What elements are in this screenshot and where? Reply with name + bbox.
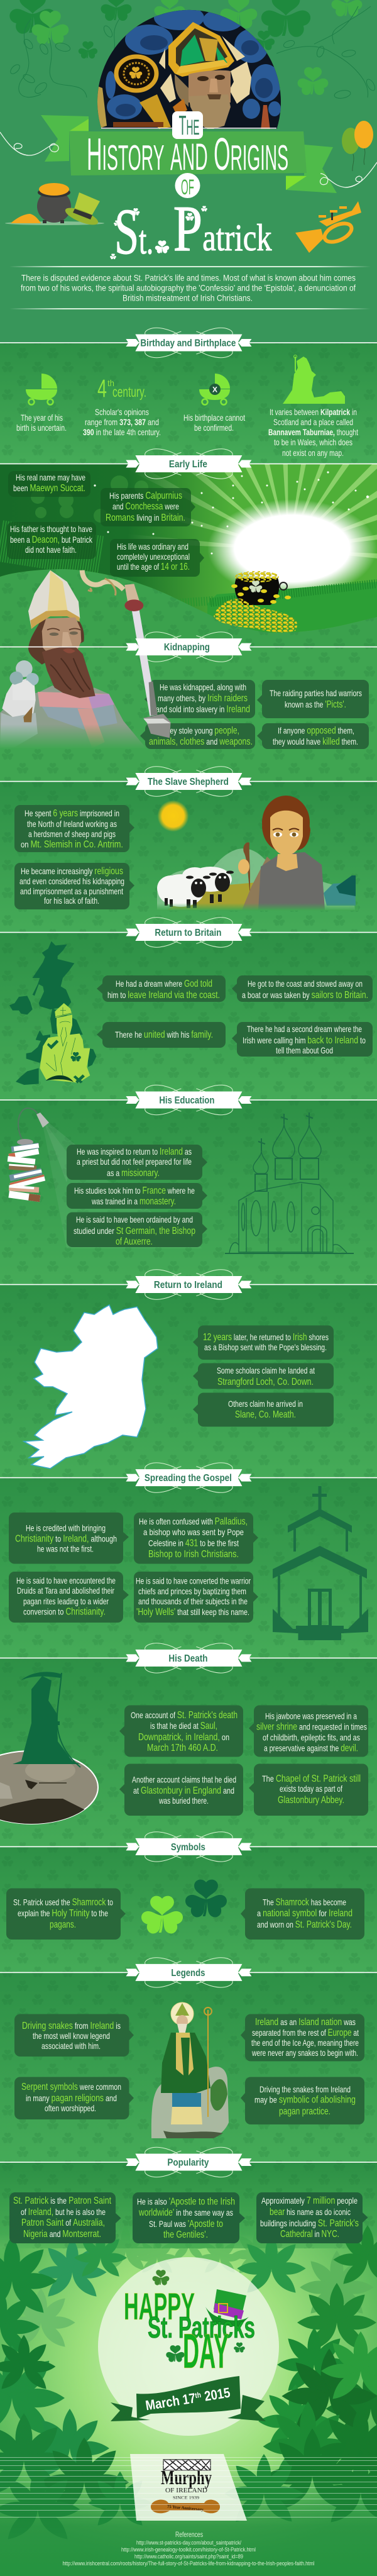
date ribbon (111, 2376, 266, 2421)
bubble: symbolic: pagan practice. (279, 2106, 331, 2117)
bubble: Apostle: worldwide' in the same way as (138, 2207, 233, 2218)
icons: two shamrocks (139, 1880, 229, 1936)
bubble: jawbone (249, 1706, 368, 1757)
bubble: religious: for his lack of faith. (44, 896, 99, 906)
bubble: 12 years later (193, 1326, 334, 1360)
icon: trumpet (295, 201, 361, 253)
Murphy of Ireland logo panel: SINCE 1939 (173, 2496, 200, 2501)
section heading: Early Life (0, 449, 377, 479)
title: History and Origins: HISTORY AND ORIGINS (87, 130, 288, 180)
section heading: His Death (0, 1643, 377, 1673)
text: scholars' opinions: range from 373, 387 and (85, 417, 159, 427)
bubble: Christianity: he was not the first. (37, 1543, 94, 1553)
decorative stripes (0, 2457, 377, 2518)
bubble: 12 years later: 12 years later, he returned to Irish shores (203, 1332, 329, 1343)
title: St. Patrick: St. (114, 196, 153, 268)
bubble: religious: He became increasingly religious (21, 866, 123, 877)
references: http://www.st-patricks-day.com/about_saintpatrick/ (136, 2540, 241, 2546)
bubble: Palladius: a bishop who was sent by Pope (143, 1527, 244, 1537)
bubble: six years: He spent 6 years imprisoned in (25, 808, 119, 819)
bubble: Apostle: He is also 'Apostle to the Irish (137, 2197, 235, 2207)
bubble: Apostle: St. Paul was 'Apostle to (149, 2219, 223, 2229)
bubble: serpent symbols: in many pagan religions and (26, 2093, 117, 2104)
illustration: St. Patrick driving out snakes (151, 2002, 229, 2138)
bubble: island nation: Ireland as an Island nation was (255, 2017, 356, 2028)
bubble: driving snakes: associated with him. (41, 2041, 101, 2051)
bubble: dream: him to leave Ireland via the coast. (107, 990, 220, 1001)
bubble: St. Patrick's death: One account of St. Patrick's death (131, 1710, 238, 1721)
bubble: driving snakes: Driving snakes from Ireland is (22, 2021, 121, 2031)
bubble: Strangford Loch: Some scholars claim he landed at (217, 1365, 315, 1375)
bubble: island nation: separated from the rest of Europe at (252, 2028, 359, 2038)
map: Ireland (24, 1305, 158, 1468)
stat: 4th century (97, 375, 146, 402)
bubble: national symbol: a national symbol for Ireland (257, 1908, 352, 1919)
bubble: serpent symbols: Serpent symbols were common (21, 2082, 121, 2092)
bubble: national symbol (241, 1888, 364, 1940)
references: http://www.irish-genealogy-toolkit.com/history-of-St-Patrick.html (121, 2546, 256, 2553)
decorative white swirls (0, 132, 377, 187)
bubble: Holy Wells: He is said to have converted the warrior (136, 1576, 251, 1586)
icon: pram (26, 374, 57, 405)
bubble: St. Patrick's death (119, 1706, 243, 1757)
greeting: Happy St. Patrick's Day (124, 2270, 255, 2379)
section heading: Symbols (0, 1832, 377, 1862)
bubble: father: did not have faith. (25, 545, 77, 555)
bubble: kidnapped: many others, by Irish raiders (158, 693, 248, 704)
bubble: jawbone: a preservative against the devil. (264, 1743, 358, 1754)
photo: St. Patrick's grave stone (0, 1751, 98, 1827)
bubble: religious (14, 863, 134, 909)
bubble: dream: He had a dream where God told (116, 979, 212, 989)
bubble: France: His studies took him to France where he (74, 1185, 195, 1196)
icon: sun (157, 800, 188, 831)
bubble: national symbol: and worn on St. Patrick's Day. (257, 1919, 352, 1930)
intro text (21, 273, 356, 303)
Murphy of Ireland logo panel: Murphy (161, 2466, 212, 2489)
references: References (175, 2530, 203, 2539)
bubble: Druids: pagan rites leading to a wider (23, 1596, 109, 1606)
bubble: inspired: He was inspired to return to Ireland as (77, 1146, 192, 1157)
Murphy of Ireland logo panel: 75 Year Anniversary (167, 2504, 204, 2512)
statue of St. Patrick (0, 570, 151, 748)
bubble: France: was trained in a monastery. (91, 1196, 176, 1207)
tab: THE (172, 110, 203, 141)
crozier staff (82, 570, 171, 738)
bubble: 7 million (256, 2192, 368, 2243)
section heading: Spreading the Gospel: Spreading the Gospel (145, 1473, 232, 1484)
bubble: Slane: Slane, Co. Meath. (235, 1409, 296, 1420)
icon: pot of gold and green hat (5, 183, 104, 228)
bubble: Glastonbury: Another account claims that he died (132, 1775, 236, 1785)
bubble: Chapel: exists today as part of (280, 1784, 342, 1794)
bubble: Chapel (249, 1763, 368, 1816)
section heading: The Slave Shepherd: The Slave Shepherd (148, 777, 229, 787)
map: Britain with St. Patrick (9, 941, 96, 1085)
footer leaf background (0, 2224, 377, 2576)
bubble: St. Patrick's death: March 17th 460 A.D. (147, 1743, 218, 1753)
bubble: Holy Wells: 'Holy Wells' that still keep this name. (136, 1607, 249, 1618)
badge: OF: OF (181, 175, 194, 199)
bubble: national symbol: The Shamrock has become (263, 1897, 346, 1908)
bubble: 7 million: buildings including St. Patrick's (260, 2218, 359, 2229)
intro text: British mistreatment of Irish Christians. (123, 293, 253, 303)
text: birthplace options (268, 407, 358, 458)
bubble: St. Patrick's death: Downpatrick, in Ireland, on (138, 1732, 229, 1743)
section heading: Birthday and Birthplace: Birthday and Birthplace (140, 338, 236, 348)
text: scholars' opinions (83, 407, 161, 437)
text: birthplace options: not exist on any map. (282, 448, 344, 458)
bubble: driving snakes (14, 2014, 134, 2057)
bubble: inspired (67, 1145, 207, 1180)
bubble: Strangford Loch (193, 1363, 334, 1389)
section heading: The Slave Shepherd (0, 767, 377, 796)
footer circle (98, 2257, 279, 2436)
bubble: symbolic (241, 2077, 364, 2124)
bubble: six years: the North of Ireland working as (27, 819, 117, 829)
bubble: Palladius: Celestine in 431 to be the first (148, 1538, 239, 1549)
bubble: Glastonbury (119, 1763, 243, 1816)
background: lower sections (0, 343, 377, 2263)
section heading: Popularity: Popularity (167, 2157, 209, 2168)
bubble: Chapel: Glastonbury Abbey. (278, 1795, 344, 1806)
bubble: ordinary life: His life was ordinary and (117, 541, 188, 552)
bubble: Druids: conversion to Christianity. (23, 1606, 106, 1618)
text: birth year (16, 413, 67, 433)
bubble: Glastonbury: was buried there. (158, 1796, 209, 1806)
bubble: serpent symbols (14, 2077, 134, 2119)
bubble: Slane: Others claim he arrived in (228, 1399, 303, 1409)
bubble: Glastonbury: at Glastonbury in England and (133, 1785, 234, 1796)
bubble: 7 million: Cathedral in NYC. (280, 2229, 339, 2240)
header shamrocks and vines (7, 0, 376, 99)
text: scholars' opinions: Scholar's opinions (95, 407, 149, 417)
bubble: opposed (257, 723, 369, 749)
bubble: Patron Saint: St. Patrick is the Patron Saint (13, 2196, 111, 2206)
badge: OF (175, 173, 200, 199)
bubble: symbolic: may be symbolic of abolishing (254, 2095, 356, 2106)
section heading: Return to Ireland: Return to Ireland (154, 1280, 222, 1291)
illustration: grim reaper (13, 1672, 80, 1767)
bubble: father (7, 522, 96, 559)
date ribbon: March 17 (145, 2389, 206, 2413)
bubble: ordinary life (110, 539, 204, 577)
bubble: France (67, 1183, 207, 1209)
bubble: second dream: Irish were calling him back to Ireland to (243, 1035, 366, 1046)
bubble: real name (8, 471, 90, 497)
bubble: Picts (257, 680, 369, 718)
bubble: opposed: they would have killed them. (273, 736, 358, 747)
bubble: Holy Wells: and thousands of their subjects in the (138, 1596, 248, 1606)
bubble: Apostle: the Gentiles'. (163, 2229, 208, 2240)
bubble: six years (14, 805, 134, 852)
references: http://www.irishcentral.com/roots/history/The-full-story-of-St-Patricks-life-from-kidnapping-to-the-Irish-peoples-faith.html (63, 2560, 314, 2567)
bubble: opposed: If anyone opposed them, (278, 726, 354, 736)
section heading: His Education (0, 1085, 377, 1115)
greeting: Happy St. Patrick's Day: DAY (183, 2323, 229, 2379)
bubble: stole people: animals, clothes and weapons. (149, 736, 253, 747)
bubble: Patron Saint: Patron Saint of Australia, (21, 2218, 105, 2228)
text: birthplace (183, 413, 245, 433)
section heading: His Education: His Education (159, 1096, 214, 1106)
text: birthplace options: to be in Wales, which does (274, 437, 352, 447)
bubble: Holy Trinity (6, 1888, 126, 1940)
bubble: father: His father is thought to have (10, 524, 92, 534)
bubble: St. Patrick's death: is that he died at Saul, (150, 1721, 217, 1731)
icon: desk lamp with book stack (8, 1108, 202, 1248)
bubble: stowed away (232, 975, 373, 1002)
title: St. Patrick: Patrick (173, 192, 271, 265)
bubble: Holy Wells: chiefs and princes by baptizing them (138, 1586, 246, 1596)
text: birthplace options: Bannavem Taburniae, thought (268, 427, 358, 437)
bubble: real name: been Maewyn Succat. (13, 483, 85, 494)
stat: 4th century: 4 (97, 375, 107, 402)
title: St. Patrick (110, 192, 272, 268)
section heading: Popularity (0, 2147, 377, 2177)
section heading: Return to Ireland (0, 1270, 377, 1299)
bubble: serpent symbols: often worshipped. (45, 2103, 96, 2113)
bubble: dream (97, 975, 226, 1002)
Murphy of Ireland logo panel: OF IRELAND (165, 2487, 207, 2494)
section heading: His Death: His Death (168, 1653, 207, 1664)
bubble: Slane (193, 1392, 334, 1426)
bubble: 7 million: Approximately 7 million people (261, 2196, 358, 2206)
icon: pram with X (199, 374, 230, 405)
stained glass portrait of St. Patrick (94, 5, 283, 132)
greeting: Happy St. Patrick's Day: HAPPY (124, 2285, 195, 2328)
scene: shepherd with sheep (157, 796, 358, 911)
bubble: real name: His real name may have (16, 472, 85, 482)
bubble: Apostle (133, 2192, 245, 2243)
bubble: parents: and Conchessa were (112, 501, 179, 512)
references (63, 2530, 314, 2567)
bubble: Palladius (134, 1513, 258, 1563)
bubble: Christianity: He is credited with bringing (26, 1523, 106, 1533)
section heading: Return to Britain: Return to Britain (155, 928, 221, 938)
bubble: religious: and even considered his kidnapping (19, 876, 124, 886)
background: header (0, 0, 377, 343)
icon: pram with X: X (212, 385, 217, 394)
text: scholars' opinions: 390 in the late 4th century. (83, 427, 161, 437)
bubble: parents: Romans living in Britain. (106, 513, 185, 523)
bubble: stole people: They stole young people, (162, 726, 239, 736)
bubble: St Germain: of Auxerre. (116, 1236, 153, 1247)
bubble: Patron Saint: of Ireland, but he is also the (21, 2207, 106, 2218)
bubble: family (97, 1022, 226, 1048)
bubble: St Germain: studied under St Germain, the Bishop (74, 1226, 195, 1236)
bubble: Holy Trinity: explain the Holy Trinity to the (18, 1908, 108, 1919)
date ribbon: 2015 (200, 2385, 231, 2404)
bubble: Druids: Druids at Tara and abolished their (17, 1585, 114, 1596)
bubble: inspired: a priest but did not feel prepared for life (77, 1157, 192, 1167)
section heading: Kidnapping: Kidnapping (164, 642, 210, 653)
bubble: driving snakes: the most well know legend (33, 2031, 110, 2041)
section heading: Legends: Legends (171, 1968, 205, 1979)
stat: 4th century: century. (112, 384, 146, 400)
icon: balloons (342, 121, 373, 171)
section heading: Return to Britain (0, 918, 377, 947)
ribbon (41, 115, 337, 193)
bubble: stole people (140, 723, 255, 749)
bubble: parents: His parents Calpurnius (109, 491, 182, 501)
bubble: inspired: as a missionary. (107, 1168, 160, 1179)
references: http://www.catholic.org/saints/saint.php?saint_id=89 (134, 2553, 243, 2560)
bubble: 7 million: bear his name as do iconic (270, 2207, 351, 2218)
text: birth year: The year of his (21, 413, 63, 423)
intro rules (9, 266, 371, 309)
section heading: Legends (0, 1958, 377, 1987)
section heading: Spreading the Gospel (0, 1463, 377, 1492)
bubble: kidnapped (145, 680, 255, 718)
text: birthplace: His birthplace cannot (183, 413, 245, 423)
bubble: kidnapped: and sold into slavery in Ireland (156, 704, 250, 714)
bubble: second dream: tell them about God (276, 1045, 333, 1055)
bubble: Holy Trinity: pagans. (50, 1919, 76, 1930)
bubble: father: been a Deacon, but Patrick (10, 535, 93, 545)
bubble: six years: a herdsmen of sheep and pigs (28, 829, 116, 839)
bubble: Picts: known as the 'Picts'. (285, 699, 346, 710)
bubble: St Germain (67, 1213, 207, 1247)
bubble: Druids (9, 1572, 129, 1623)
section heading: Birthday and Birthplace (0, 328, 377, 358)
text: birthplace options: It varies between Kilpatrick in (270, 407, 357, 417)
greeting: Happy St. Patrick's Day: St. Patricks (148, 2311, 255, 2345)
bubble: six years: on Mt. Slemish in Co. Antrim. (21, 839, 123, 850)
section heading: Symbols: Symbols (171, 1842, 205, 1853)
bubble: Patron Saint (9, 2192, 121, 2243)
icon: pot of gold (214, 571, 297, 633)
bubble: religious: and imprisonment as a punishment (20, 886, 123, 896)
bubble: Strangford Loch: Strangford Loch, Co. Down. (217, 1377, 314, 1387)
bubble: island nation (241, 2014, 364, 2062)
bubble: Palladius: He is often confused with Palladius, (139, 1516, 248, 1527)
bubble: Patron Saint: Nigeria and Montserrat. (23, 2229, 101, 2240)
illustration: church outline (225, 1113, 354, 1253)
Murphy of Ireland logo panel (130, 2454, 247, 2521)
date ribbon: th (194, 2390, 202, 2400)
icon: church silhouette (273, 1486, 368, 1640)
bubble: kidnapped: He was kidnapped, along with (160, 682, 246, 692)
bubble: parents (101, 488, 195, 526)
bubble: family: There he united with his family. (115, 1030, 213, 1040)
bubble: ordinary life: completely unexceptional (117, 552, 190, 562)
panel: early life scene with sunburst (0, 464, 377, 633)
bubble: 12 years later: as a Bishop sent with the Pope's blessing. (204, 1342, 327, 1352)
section heading: Early Life: Early Life (169, 459, 207, 470)
bubble: second dream (232, 1022, 373, 1057)
bubble: Holy Wells (134, 1572, 258, 1623)
text: birthplace: be confirmed. (194, 423, 234, 433)
bubble: St Germain: He is said to have been ordained by and (76, 1214, 193, 1224)
bubble: Palladius: Bishop to Irish Christians. (148, 1549, 239, 1560)
bubble: Christianity: Christianity to Ireland, although (15, 1533, 117, 1544)
stat: 4th century: th (107, 378, 114, 388)
text: birth year: birth is uncertain. (16, 423, 67, 433)
section heading: Kidnapping (0, 632, 377, 662)
tab: THE: THE (178, 110, 200, 141)
icon: St. Patrick silhouette on rock (283, 355, 345, 404)
bubble: Holy Trinity: St. Patrick used the Shamrock to (13, 1897, 113, 1908)
bubble: Christianity (9, 1513, 129, 1563)
bubble: ordinary life: until the age of 14 or 16. (117, 562, 190, 572)
bubble: Druids: He is said to have encountered the (16, 1575, 116, 1585)
